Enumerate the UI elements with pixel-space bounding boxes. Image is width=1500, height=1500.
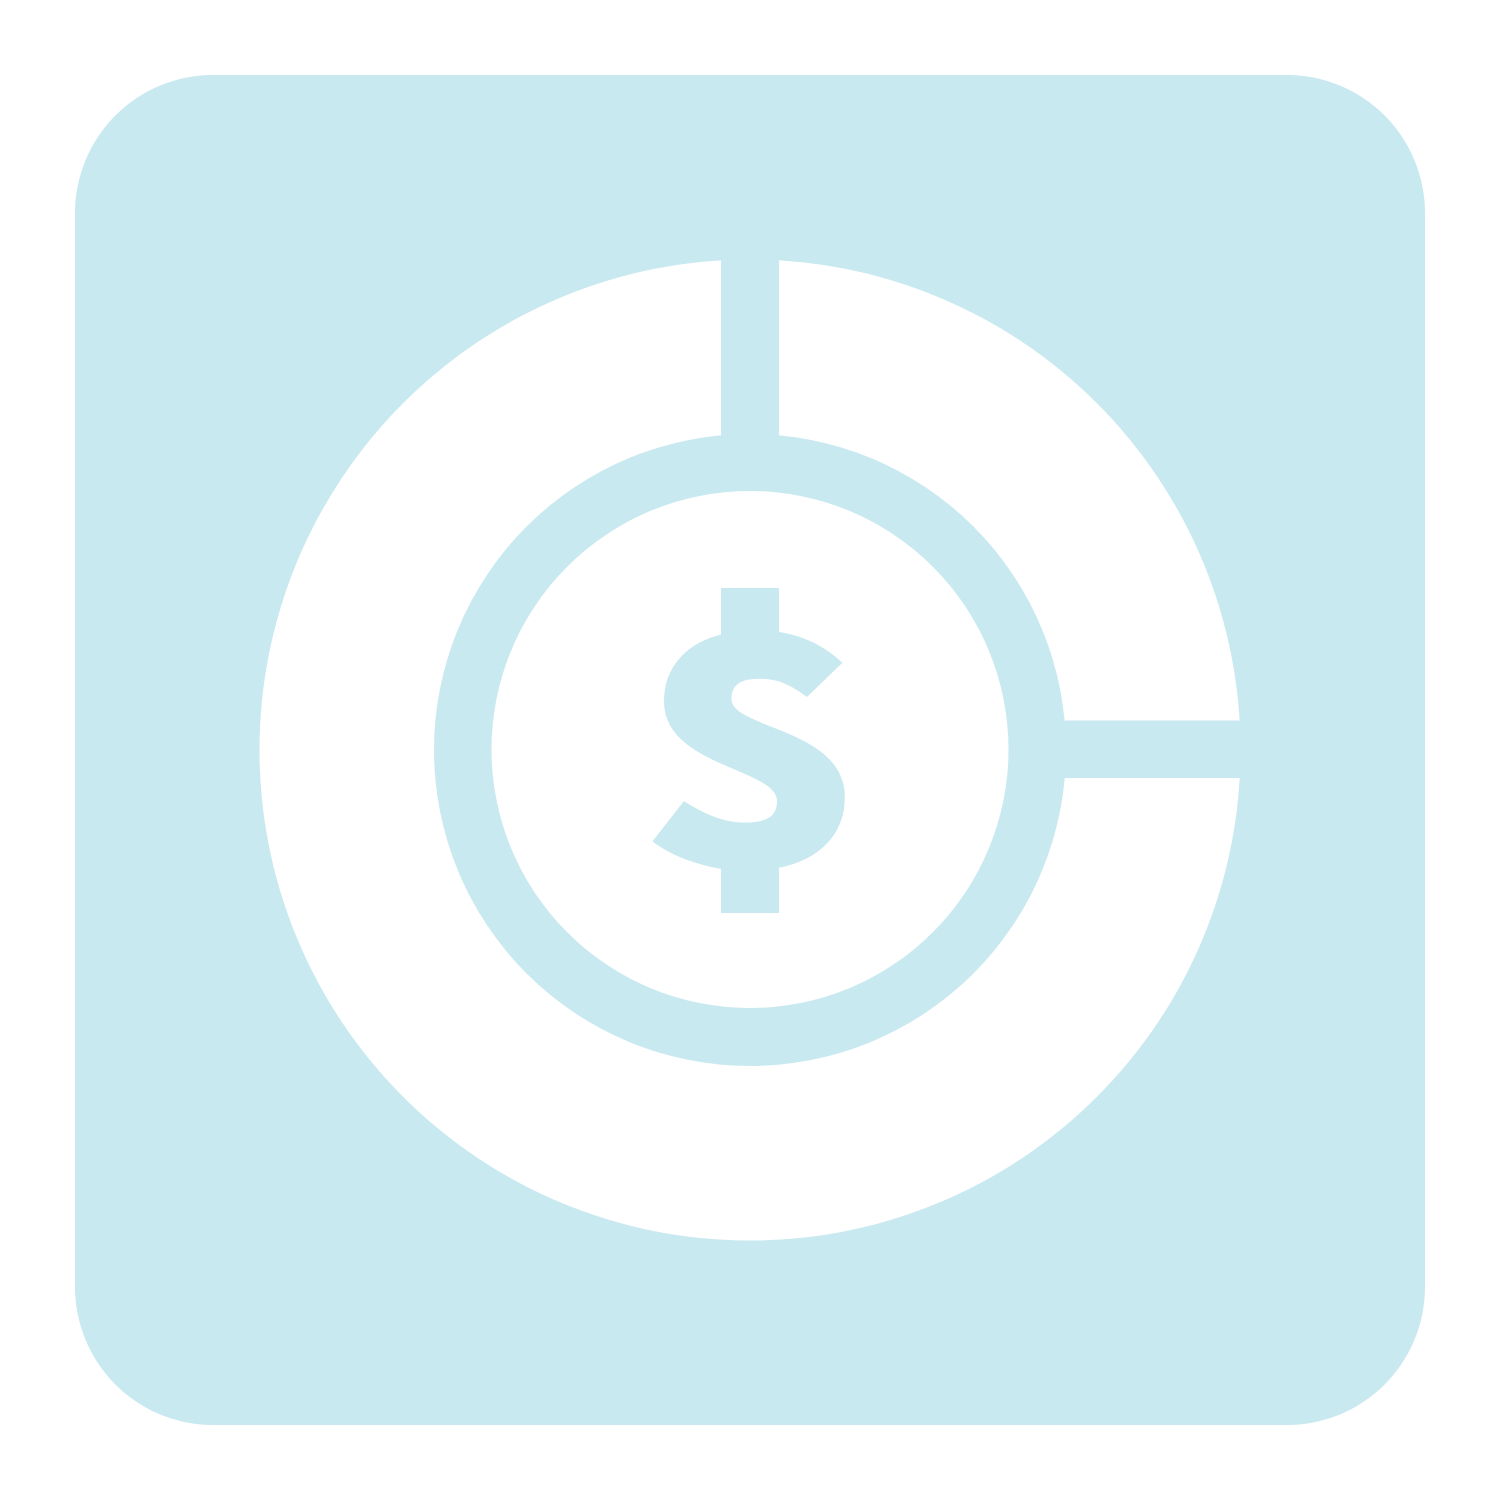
inner white circle	[492, 491, 1008, 1008]
icon: dollar sign: $	[639, 500, 869, 956]
chart: donut with segment gaps	[260, 250, 1250, 1240]
